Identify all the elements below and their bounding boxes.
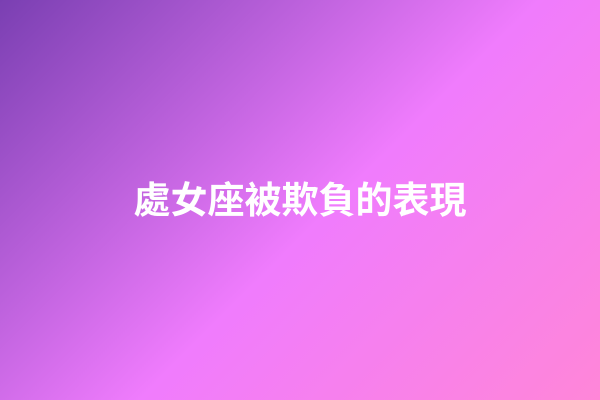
title: 處女座被欺負的表現	[134, 180, 466, 221]
